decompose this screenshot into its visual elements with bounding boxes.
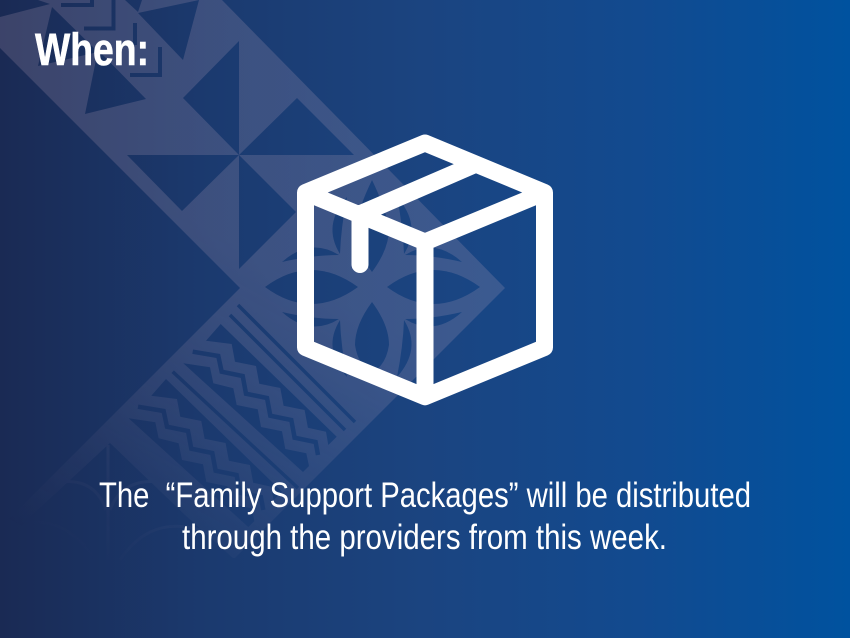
body text [99, 476, 751, 557]
body text: through the providers from this week. [182, 518, 667, 557]
background tribal pattern band [0, 0, 505, 542]
icon: cardboard box [306, 143, 544, 397]
heading: When: [35, 24, 149, 75]
